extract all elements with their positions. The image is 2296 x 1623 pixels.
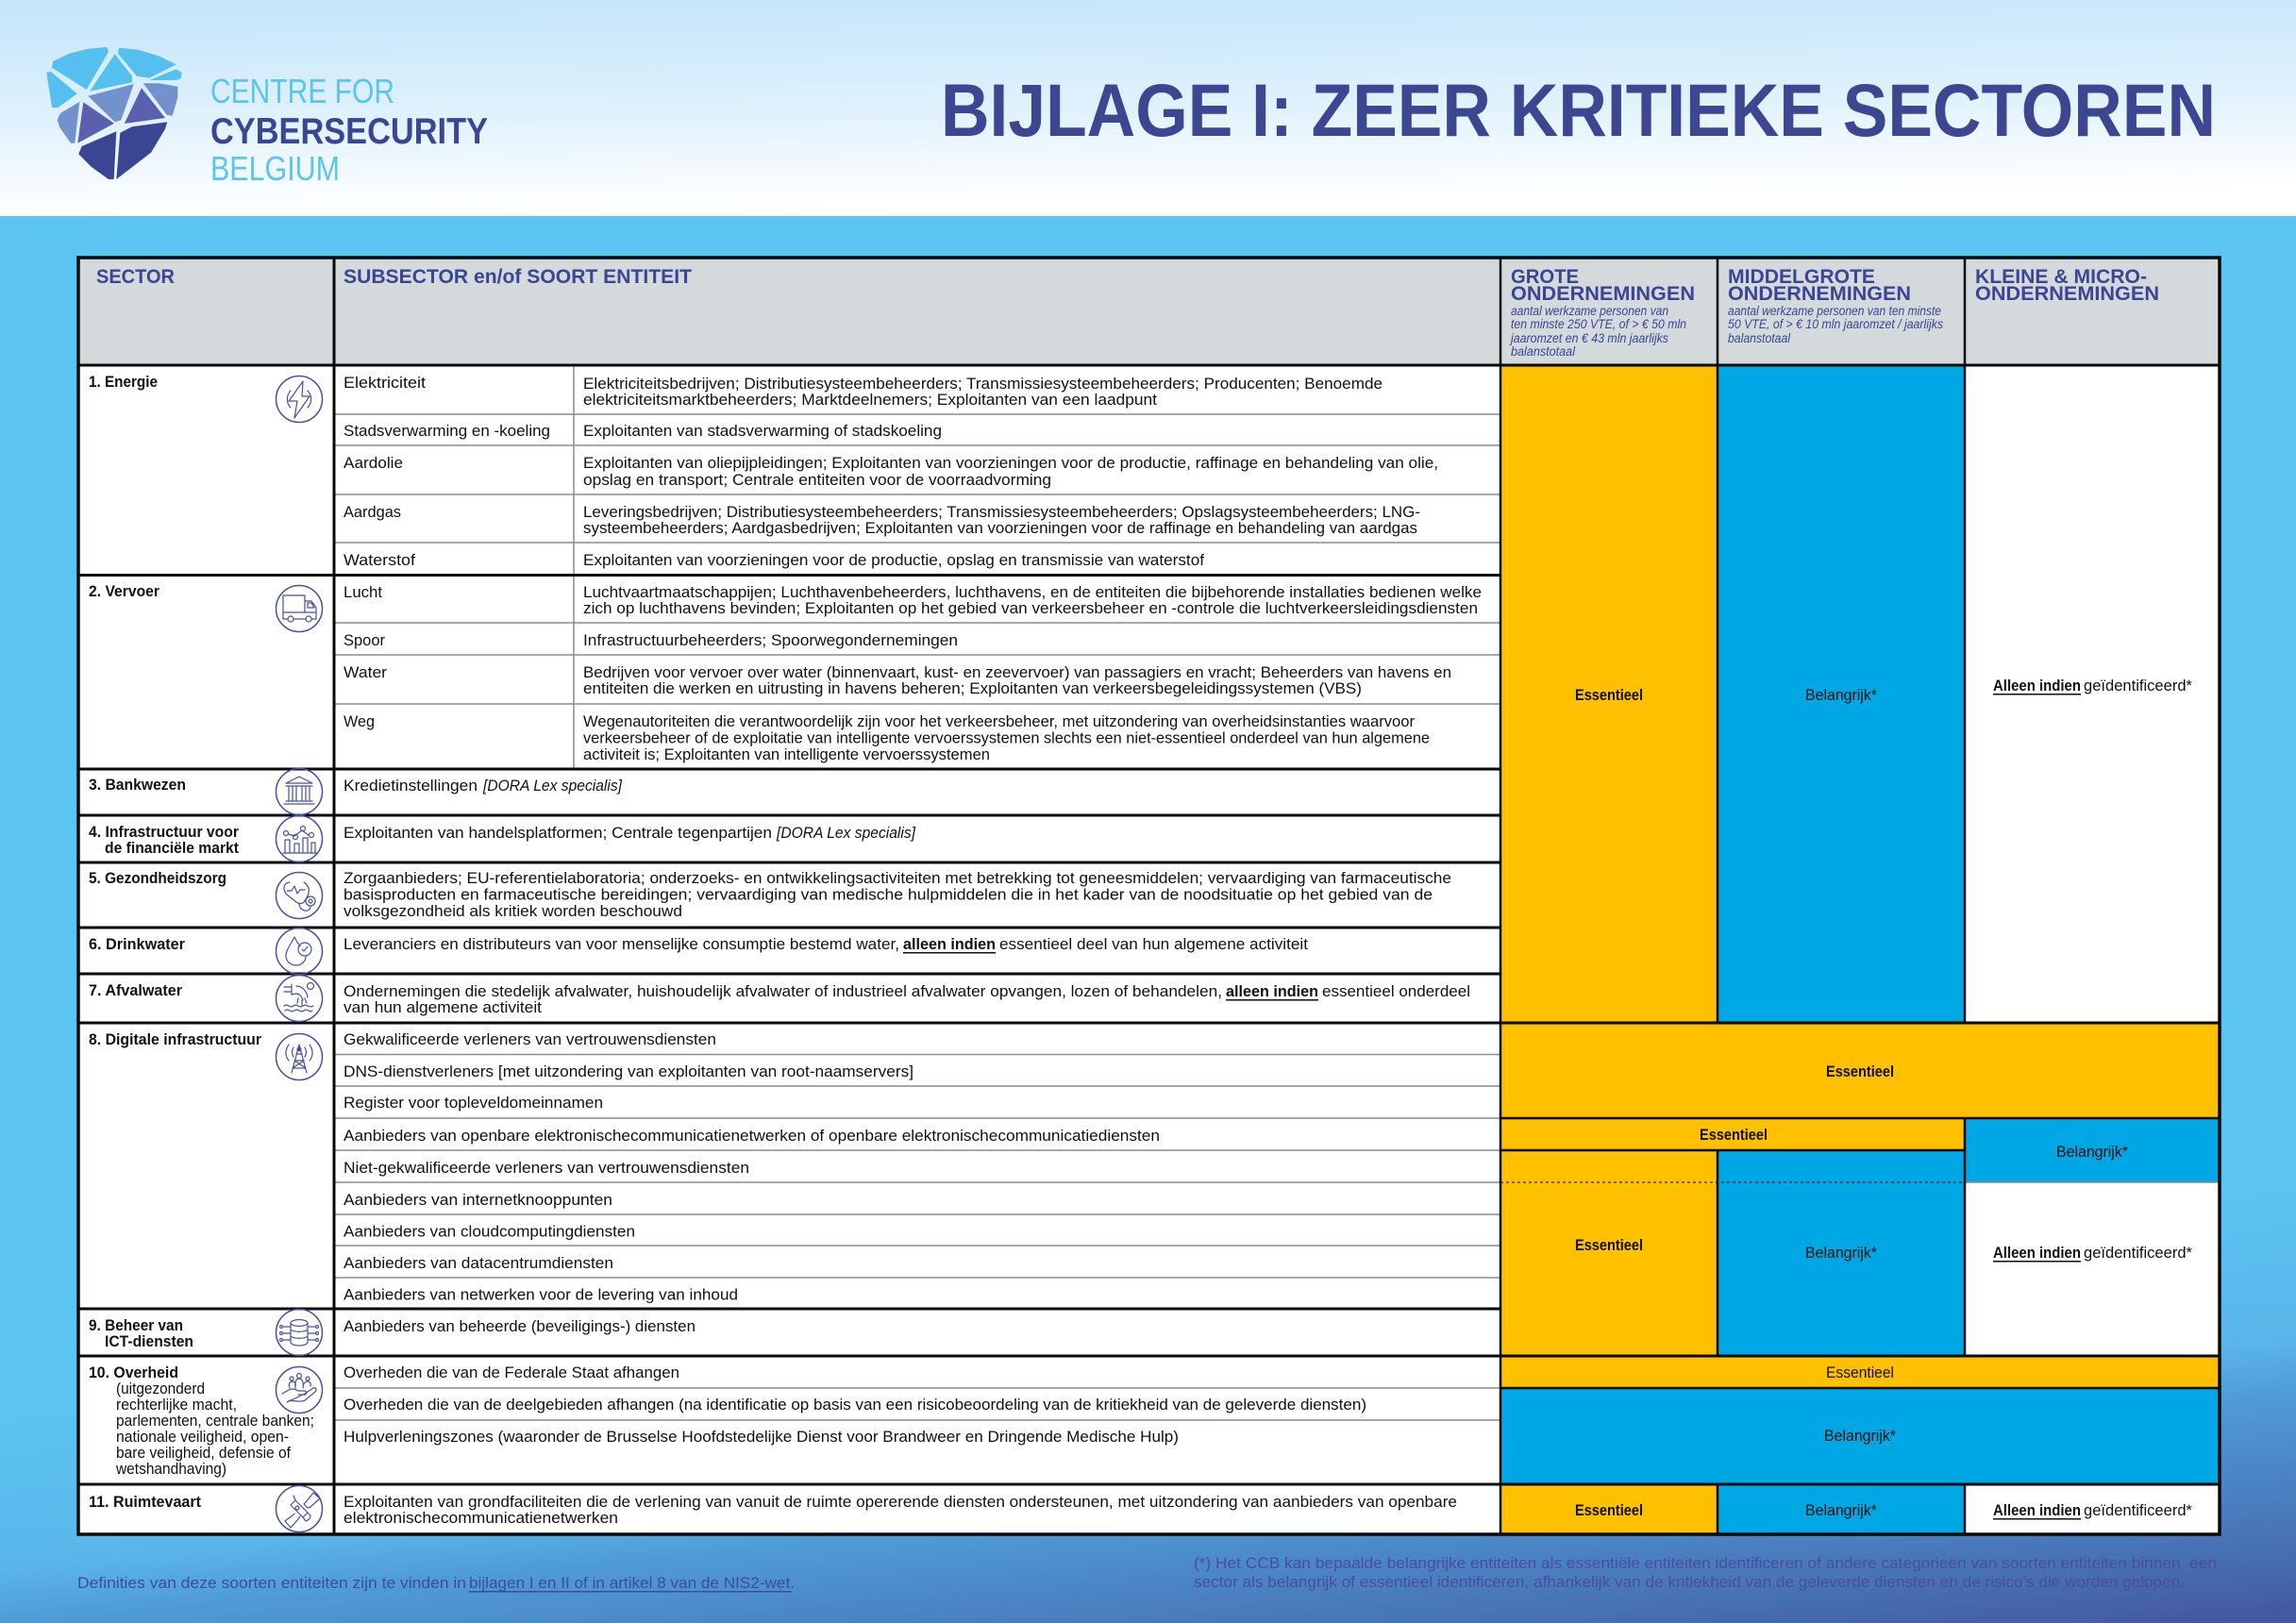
subsectors: Bedrijven voor vervoer over water (binnenvaart, kust- en zeevervoer) van passagiers en vracht; Beheerders van havens en	[583, 663, 1451, 681]
sector 10 note: wetshandhaving)	[115, 1460, 226, 1478]
icon: antenna tower	[276, 1034, 323, 1079]
sector 3: Bankwezen: Kredietinstellingen	[344, 777, 478, 795]
header: grote ondernemingen: ONDERNEMINGEN	[1511, 283, 1695, 305]
subsectors: zich op luchthavens bevinden; Exploitanten op het gebied van verkeersbeheer en -controle die luchtverkeersleidingsdiensten	[583, 599, 1478, 617]
sector 2: Vervoer	[89, 582, 1482, 763]
sector 8: Digitale infrastructuur	[89, 1030, 1160, 1304]
subsectors: Stadsverwarming en -koeling	[344, 422, 550, 440]
icon: water drop with check	[276, 929, 323, 974]
classification labels: geïdentificeerd*	[2084, 1501, 2192, 1519]
sector 10 note: (uitgezonderd	[116, 1380, 205, 1397]
sector 6: Drinkwater: Leveranciers en distributeurs van voor menselijke consumptie bestemd water,	[344, 935, 899, 953]
sector 11: Ruimtevaart: Exploitanten van grondfaciliteiten die de verlening van vanuit de ruimte opererende diensten ondersteunen, met uitzondering van aanbieders van openbare	[344, 1493, 1457, 1511]
subsectors: Water	[344, 663, 387, 681]
classification labels: Belangrijk*	[1824, 1427, 1896, 1445]
sector 5: Gezondheidszorg: basisproducten en farmaceutische bereidingen; vervaardiging van medische hulpmiddelen die in het kader van de noodsituatie op het gebied van de	[344, 885, 1433, 904]
sector 10 note: bare veiligheid, defensie of	[116, 1444, 291, 1462]
header: kleine en micro-ondernemingen	[1975, 266, 2159, 305]
sector 5: Gezondheidszorg: 5. Gezondheidszorg	[89, 869, 226, 887]
sector 11: Ruimtevaart: elektronischecommunicatienetwerken	[344, 1509, 618, 1527]
icon: bar chart	[276, 815, 323, 862]
classification labels: Alleen indien	[1993, 1244, 2081, 1262]
sector 10: Overheid: Hulpverleningszones (waaronder de Brusselse Hoofdstedelijke Dienst voor Brandweer en Dringende Medische Hulp)	[344, 1428, 1179, 1446]
sector 10 note	[115, 1380, 314, 1478]
subsectors: verkeersbeheer of de exploitatie van intelligente vervoerssystemen slechts een niet-essentieel onderdeel van hun algemene	[583, 728, 1430, 747]
table header row: SECTOR	[96, 266, 175, 288]
sector 3: Bankwezen: [DORA Lex specialis]	[482, 777, 623, 795]
subsectors: Exploitanten van oliepijpleidingen; Exploitanten van voorzieningen voor de productie, raffinage en behandeling van olie,	[583, 454, 1438, 472]
classification labels: Belangrijk*	[1805, 1244, 1877, 1262]
subsectors	[344, 583, 1482, 763]
sector 8: Digitale infrastructuur: Aanbieders van cloudcomputingdiensten	[344, 1223, 635, 1240]
classification labels: Essentieel	[1575, 686, 1643, 704]
classification labels: geïdentificeerd*	[2084, 677, 2192, 694]
sector 8: Digitale infrastructuur: 8. Digitale infrastructuur	[89, 1030, 261, 1048]
classification cells	[1500, 365, 2220, 1533]
subsectors: Weg	[344, 712, 375, 730]
sector 3: Bankwezen	[89, 768, 623, 815]
sector 10 note: rechterlijke macht,	[116, 1396, 237, 1414]
classification labels: Alleen indien	[1993, 1501, 2081, 1519]
sector 10: Overheid: Overheden die van de deelgebieden afhangen (na identificatie op basis van een risicobeoordeling van de kritiekheid van de geleverde diensten)	[344, 1396, 1366, 1414]
header: grote ondernemingen: ten minste 250 VTE, of > € 50 mln	[1511, 317, 1686, 331]
subsectors: Exploitanten van voorzieningen voor de productie, opslag en transmissie van waterstof	[583, 551, 1204, 569]
subsectors: Aardgas	[344, 503, 401, 521]
header: middelgrote ondernemingen: 50 VTE, of > € 10 mln jaaromzet / jaarlijks	[1728, 317, 1943, 331]
subsectors: Spoor	[344, 631, 385, 649]
sector 6: Drinkwater: essentieel deel van hun algemene activiteit	[999, 935, 1308, 953]
sector 7: Afvalwater: alleen indien	[1226, 982, 1318, 1000]
icon: hand holding people	[276, 1366, 323, 1414]
subsectors: elektriciteitsmarktbeheerders; Marktdeelnemers; Exploitanten van een laadpunt	[583, 391, 1157, 409]
subsectors: Luchtvaartmaatschappijen; Luchthavenbeheerders, luchthavens, en de entiteiten die bijbehorende installaties bedienen welke	[583, 583, 1482, 601]
icon: database network	[276, 1310, 323, 1355]
sector 9: Beheer van ICT-diensten: 9. Beheer van	[89, 1316, 183, 1334]
sector 7: Afvalwater: essentieel onderdeel	[1322, 982, 1470, 1000]
subsectors: Exploitanten van stadsverwarming of stadskoeling	[583, 422, 942, 440]
header: grote ondernemingen: balanstotaal	[1511, 344, 1576, 359]
sector 4: Infrastructuur voor de financiële markt: 4. Infrastructuur voor	[89, 823, 239, 841]
sector 4: Infrastructuur voor de financiële markt: Exploitanten van handelsplatformen; Centrale tegenpartijen	[344, 824, 772, 842]
subsectors: opslag en transport; Centrale entiteiten voor de voorraadvorming	[583, 471, 1051, 489]
subsectors: Leveringsbedrijven; Distributiesysteembeheerders; Transmissiesysteembeheerders; Opslagsysteembeheerders; LNG-	[583, 503, 1420, 521]
logo text	[210, 72, 488, 188]
sector 5: Gezondheidszorg	[89, 869, 1451, 920]
footer note: asterisk	[1194, 1554, 2217, 1591]
header: kleine en micro-ondernemingen: KLEINE & MICRO-	[1975, 266, 2147, 288]
sector 10 note: parlementen, centrale banken;	[116, 1412, 314, 1430]
logo: Centre for Cybersecurity Belgium	[46, 47, 488, 188]
sector 10: Overheid	[89, 1364, 1366, 1478]
sector 10 note: nationale veiligheid, open-	[116, 1428, 289, 1446]
sector 4: Infrastructuur voor de financiële markt: [DORA Lex specialis]	[776, 824, 916, 842]
header: grote ondernemingen: aantal werkzame personen van	[1511, 304, 1668, 318]
sector 1: Energie: 1. Energie	[89, 373, 158, 391]
header: middelgrote ondernemingen: balanstotaal	[1728, 331, 1791, 345]
classification labels: Alleen indien	[1993, 677, 2081, 694]
sector 8: Digitale infrastructuur: Register voor topleveldomeinnamen	[344, 1094, 603, 1112]
table body background	[78, 258, 2220, 1534]
subsectors: activiteit is; Exploitanten van intelligente vervoerssystemen	[583, 745, 990, 763]
header banner	[0, 0, 2296, 216]
sector 11: Ruimtevaart: 11. Ruimtevaart	[89, 1493, 201, 1511]
classification labels: Essentieel	[1575, 1236, 1643, 1254]
footer note: asterisk: sector als belangrijk of essentieel identificeren, afhankelijk van de kritiekheid van de geleverde diensten en de risico's die worden gelopen.	[1194, 1573, 2185, 1591]
sector 9: Beheer van ICT-diensten: ICT-diensten	[105, 1332, 193, 1350]
header: middelgrote ondernemingen: MIDDELGROTE	[1728, 266, 1875, 288]
subsectors: Elektriciteit	[344, 374, 426, 392]
classification labels: Belangrijk*	[1805, 1501, 1877, 1519]
footer note: definitions: bijlagen I en II of in artikel 8 van de NIS2-wet.	[469, 1574, 795, 1592]
header: grote ondernemingen	[1509, 266, 1695, 359]
header: grote ondernemingen: GROTE	[1511, 266, 1579, 288]
sector 8: Digitale infrastructuur: Aanbieders van openbare elektronischecommunicatienetwerken of openbare elektronischecommunicatiediensten	[344, 1127, 1160, 1145]
header: middelgrote ondernemingen: ONDERNEMINGEN	[1728, 283, 1911, 305]
table header row: SUBSECTOR en/of SOORT ENTITEIT	[344, 266, 692, 288]
classification labels: Essentieel	[1826, 1062, 1894, 1080]
sector 1: Energie	[89, 373, 1438, 569]
sector 8: Digitale infrastructuur: Gekwalificeerde verleners van vertrouwensdiensten	[344, 1030, 716, 1048]
icon: satellite	[276, 1485, 323, 1532]
subsectors: Infrastructuurbeheerders; Spoorwegondernemingen	[583, 631, 958, 649]
footer note: definitions: Definities van deze soorten entiteiten zijn te vinden in	[77, 1574, 466, 1592]
subsectors	[344, 374, 1438, 569]
footer note: definitions	[77, 1574, 795, 1593]
sector 11: Ruimtevaart	[89, 1485, 1457, 1532]
classification labels	[1575, 677, 2192, 1519]
sector 10: Overheid: Overheden die van de Federale Staat afhangen	[344, 1364, 679, 1381]
icon: truck	[276, 585, 323, 632]
sector 5: Gezondheidszorg: Zorgaanbieders; EU-referentielaboratoria; onderzoeks- en ontwikkelingsactiviteiten met betrekking tot geneesmiddelen; vervaardiging van farmaceutische	[344, 869, 1451, 887]
sector 4: Infrastructuur voor de financiële markt: de financiële markt	[105, 839, 239, 857]
classification labels: Belangrijk*	[1805, 686, 1877, 704]
classification labels: Essentieel	[1826, 1364, 1894, 1381]
classification labels: geïdentificeerd*	[2084, 1244, 2192, 1262]
sector 9: Beheer van ICT-diensten	[89, 1310, 696, 1355]
classification labels: Essentieel	[1575, 1501, 1643, 1519]
sector 8: Digitale infrastructuur: Aanbieders van internetknooppunten	[344, 1191, 612, 1209]
icon: lightning bolt	[276, 376, 323, 423]
sector 5: Gezondheidszorg: volksgezondheid als kritiek worden beschouwd	[344, 902, 682, 920]
header: grote ondernemingen: jaaromzet en € 43 mln jaarlijks	[1509, 331, 1668, 345]
sector 9: Beheer van ICT-diensten: Aanbieders van beheerde (beveiligings-) diensten	[344, 1317, 696, 1335]
sector 7: Afvalwater: 7. Afvalwater	[89, 981, 182, 999]
subsectors: systeembeheerders; Aardgasbedrijven; Exploitanten van voorzieningen voor de raffinage en behandeling van aardgas	[583, 519, 1417, 537]
logo text: CENTRE FOR	[210, 72, 394, 110]
sector 3: Bankwezen: 3. Bankwezen	[89, 776, 186, 794]
sector 7: Afvalwater: Ondernemingen die stedelijk afvalwater, huishoudelijk afvalwater of industrieel afvalwater opvangen, lozen of behandelen,	[344, 982, 1222, 1000]
sector 6: Drinkwater	[89, 929, 1308, 974]
subsectors: Elektriciteitsbedrijven; Distributiesysteembeheerders; Transmissiesysteembeheerders; Producenten; Benoemde	[583, 375, 1383, 393]
header: middelgrote ondernemingen	[1728, 266, 1943, 345]
footer note: asterisk: (*) Het CCB kan bepaalde belangrijke entiteiten als essentiële entiteiten identificeren of andere categorieën van soorten entiteiten binnen een	[1194, 1554, 2217, 1572]
logo text: CYBERSECURITY	[210, 111, 488, 152]
subsectors: entiteiten die werken en uitrusting in havens beheren; Exploitanten van verkeersbegeleidingssystemen (VBS)	[583, 679, 1362, 697]
subsectors: Waterstof	[344, 551, 415, 569]
sector 8: Digitale infrastructuur: Aanbieders van netwerken voor de levering van inhoud	[344, 1285, 738, 1304]
icon: waste water pipe	[276, 976, 323, 1021]
table header row	[78, 258, 2220, 365]
icon: stethoscope	[276, 872, 323, 919]
logo text: BELGIUM	[210, 149, 340, 188]
sector 6: Drinkwater: alleen indien	[903, 935, 996, 953]
sector 7: Afvalwater	[89, 976, 1470, 1021]
sector 7: Afvalwater: van hun algemene activiteit	[344, 998, 542, 1016]
classification labels: Essentieel	[1700, 1126, 1768, 1144]
sector 8: Digitale infrastructuur: Aanbieders van datacentrumdiensten	[344, 1254, 613, 1272]
sector 2: Vervoer: 2. Vervoer	[89, 582, 159, 600]
sector 8: Digitale infrastructuur: DNS-dienstverleners [met uitzondering van exploitanten van root-naamservers]	[344, 1062, 913, 1080]
sector 4: Infrastructuur voor de financiële markt	[89, 815, 916, 862]
header: middelgrote ondernemingen: aantal werkzame personen van ten minste	[1728, 304, 1941, 318]
subsectors: Lucht	[344, 583, 382, 601]
sector 6: Drinkwater: 6. Drinkwater	[89, 935, 185, 953]
subsectors: Wegenautoriteiten die verantwoordelijk zijn voor het verkeersbeheer, met uitzondering van overheidsinstanties waarvoor	[583, 712, 1415, 730]
classification labels: Belangrijk*	[2056, 1143, 2128, 1161]
header: kleine en micro-ondernemingen: ONDERNEMINGEN	[1975, 283, 2159, 305]
sector 10: Overheid: 10. Overheid	[89, 1364, 178, 1381]
icon: shield mosaic	[46, 47, 182, 179]
sector 8: Digitale infrastructuur: Niet-gekwalificeerde verleners van vertrouwensdiensten	[344, 1159, 749, 1177]
icon: bank	[276, 768, 323, 815]
subsectors: Aardolie	[344, 454, 403, 472]
